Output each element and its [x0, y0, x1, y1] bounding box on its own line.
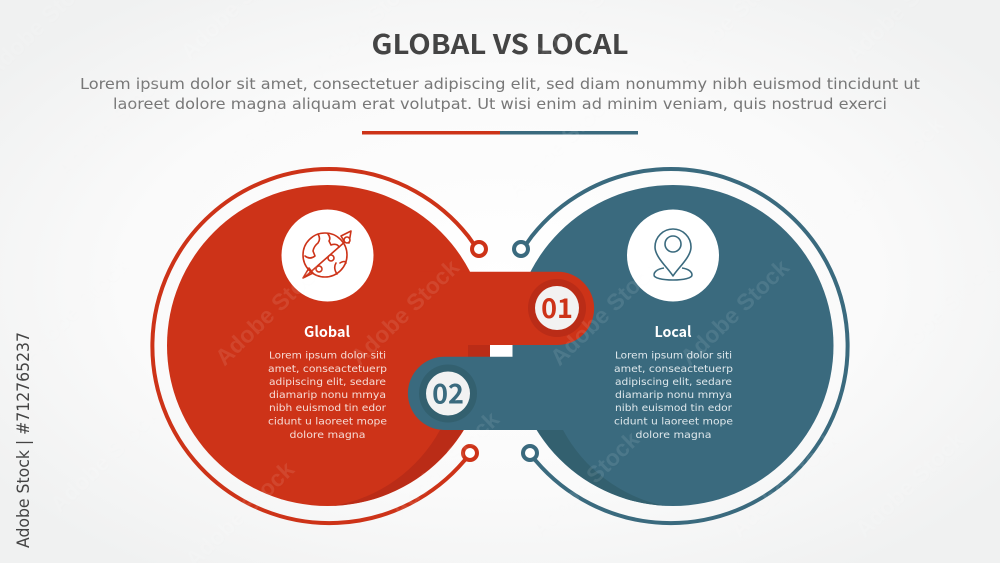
- number badge 01: [528, 279, 586, 337]
- watermark pattern: Adobe Stock: [830, 111, 949, 227]
- panel: global circle: [167, 185, 488, 506]
- watermark pattern: Adobe Stock: [850, 426, 969, 542]
- local text block: Lorem ipsum dolor siti: [615, 350, 732, 362]
- title divider: [362, 131, 638, 134]
- global text block: [268, 321, 387, 441]
- global text block: diamarip nonu mmya: [269, 390, 386, 401]
- global text block: nibh euismod tin edor: [269, 403, 387, 414]
- global text block: dolore magna: [290, 430, 366, 441]
- number badge 02: [419, 364, 477, 422]
- icon: globe: [282, 210, 374, 302]
- watermark pattern: Adobe Stock: [210, 254, 329, 370]
- intro text: Lorem ipsum dolor sit amet, consectetuer adipiscing elit, sed diam nonummy nibh euismod tincidunt ut: [80, 75, 920, 93]
- title: GLOBAL VS LOCAL: [372, 23, 628, 62]
- number badge 02: 02: [432, 372, 464, 412]
- watermark pattern: Adobe Stock: [675, 254, 794, 370]
- number badge 01: 01: [541, 287, 573, 326]
- local text block: [614, 321, 733, 441]
- local text block: cidunt u laoreet mope: [614, 416, 733, 428]
- band 02: [408, 357, 590, 430]
- watermark pattern: Adobe Stock: [180, 91, 299, 207]
- watermark pattern: Adobe Stock: [525, 426, 644, 542]
- intro text: [80, 75, 920, 113]
- watermark pattern: Adobe Stock: [15, 251, 134, 367]
- local text block: adipiscing elit, sedare: [615, 377, 732, 388]
- watermark pattern: Adobe Stock: [385, 406, 504, 522]
- watermark pattern: Adobe Stock: [345, 254, 464, 370]
- watermark pattern: Adobe Stock: [880, 254, 999, 370]
- panel: local circle: [512, 185, 834, 506]
- watermark pattern: Adobe Stock: [500, 86, 619, 202]
- global text block: amet, conseactetuerp: [268, 364, 387, 375]
- global text block: cidunt u laoreet mope: [268, 416, 387, 428]
- stock id label: Adobe Stock | #712765237: [14, 332, 34, 548]
- global text block: Lorem ipsum dolor siti: [269, 350, 386, 362]
- intro text: laoreet dolore magna aliquam erat volutpat. Ut wisi enim ad minim veniam, quis nostrud exerci: [113, 95, 887, 113]
- connector squares: [468, 345, 542, 357]
- watermark pattern: Adobe Stock: [545, 254, 664, 370]
- local outer ring: [514, 169, 848, 523]
- local text block: diamarip nonu mmya: [615, 390, 732, 401]
- watermark pattern: Adobe Stock: [45, 401, 164, 517]
- local text block: dolore magna: [636, 430, 712, 441]
- global text block: adipiscing elit, sedare: [269, 377, 386, 388]
- icon: location pin: [627, 210, 719, 302]
- watermark pattern: Adobe Stock: [50, 66, 169, 182]
- global text block: Global: [304, 321, 350, 342]
- watermark pattern: Adobe Stock: [725, 426, 844, 542]
- band 01: [420, 272, 594, 345]
- local text block: nibh euismod tin edor: [615, 403, 733, 414]
- local text block: Local: [654, 321, 692, 342]
- local text block: amet, conseactetuerp: [614, 364, 733, 375]
- global outer ring: [152, 169, 486, 523]
